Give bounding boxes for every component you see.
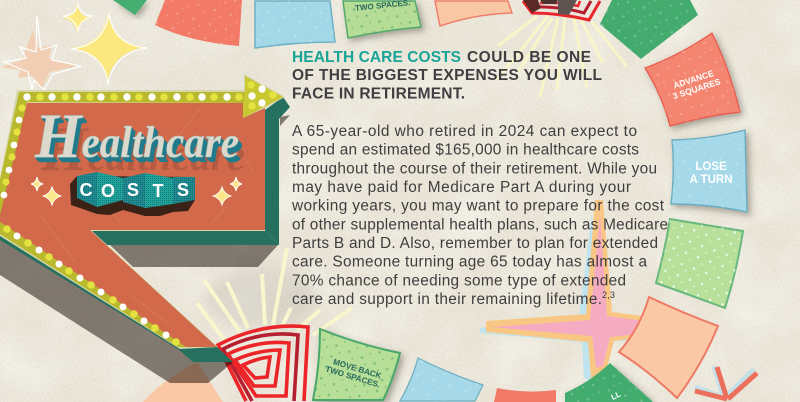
pink retro star xyxy=(480,200,650,380)
body text: 2,3 xyxy=(602,290,615,300)
sign: marquee arrow board xyxy=(0,74,290,362)
small yellow sparkle xyxy=(62,3,93,33)
sign sub-title: COSTS tiles: T xyxy=(152,181,164,201)
large yellow sparkle xyxy=(70,12,147,85)
game square: blue, bottom xyxy=(400,358,483,401)
sign: drop shadow xyxy=(0,115,290,383)
sign title: Healthcare: Healthcare xyxy=(34,100,239,171)
tile label: LOSE xyxy=(695,161,727,173)
game square: blue, top xyxy=(255,1,335,48)
game square: light green, right xyxy=(656,219,743,308)
tile shadow xyxy=(70,176,195,216)
game square: peach, bottom left xyxy=(143,362,223,402)
tile label xyxy=(668,67,722,101)
heading: COULD BE ONE xyxy=(467,49,591,66)
body text: 70% chance of needing some type of extended xyxy=(292,272,626,289)
tile label xyxy=(689,161,733,186)
sign sub-title: COSTS tiles: O xyxy=(101,181,115,201)
sign sparkles xyxy=(31,177,242,205)
top left sparkles xyxy=(0,3,147,90)
red concentric square, top xyxy=(523,0,600,20)
tile label: TWO SPACES. xyxy=(324,364,381,390)
sign title: Healthcare: Healthcare xyxy=(37,104,242,175)
game square: salmon, top xyxy=(155,0,242,46)
game square: lose a turn xyxy=(671,130,747,212)
game square: green, top left xyxy=(113,0,147,15)
tile faces xyxy=(77,172,97,207)
pale trim xyxy=(0,74,285,349)
bulb band xyxy=(0,78,281,347)
sign sub-title: COSTS tiles: S xyxy=(127,180,139,200)
tile label: LL xyxy=(610,390,622,402)
body text: A 65-year-old who retired in 2024 can expect to xyxy=(292,123,637,140)
body text: care. Someone turning age 65 today has almost a xyxy=(292,254,647,271)
scratches xyxy=(40,108,255,325)
sign title: Healthcare: Healthcare xyxy=(40,113,245,184)
orange face xyxy=(0,103,265,347)
sign sub-title: COSTS tiles xyxy=(70,172,195,216)
body text: care and support in their remaining lifetime. xyxy=(292,291,602,308)
body text: throughout the course of their retirement. While you xyxy=(292,160,657,177)
sign title: Healthcare: Healthcare xyxy=(35,102,240,173)
body text: spend an estimated $165,000 in healthcare costs xyxy=(292,142,639,159)
game square: green, top right xyxy=(600,0,698,59)
tile label: A TURN xyxy=(689,174,733,186)
peach starburst xyxy=(0,16,81,90)
heading xyxy=(292,49,602,102)
body text: of other supplemental health plans, such as Medicare xyxy=(292,216,668,233)
tile letters: C xyxy=(80,180,92,200)
body text: Parts B and D. Also, remember to plan for extended xyxy=(292,235,658,252)
heading: OF THE BIGGEST EXPENSES YOU WILL xyxy=(292,67,602,84)
tile label: 3 SQUARES xyxy=(671,76,722,101)
sign sub-title: COSTS tiles: S xyxy=(177,180,189,200)
game square: advance 3 squares xyxy=(645,33,740,126)
teal 3D sides xyxy=(0,97,290,362)
body text xyxy=(291,123,668,308)
game square: peach, top xyxy=(435,1,512,26)
sign title: Healthcare: Healthcare xyxy=(36,103,241,174)
game square: salmon, bottom xyxy=(494,388,556,402)
game square: move back two spaces xyxy=(313,329,400,400)
sunburst rays: bottom xyxy=(197,248,352,342)
heading: FACE IN RETIREMENT. xyxy=(292,86,465,102)
white bulbs xyxy=(1,85,266,338)
tile label: MOVE BACK xyxy=(332,357,383,381)
body text: working years, you may want to prepare for the cost xyxy=(291,198,665,215)
sign title: Healthcare: Healthcare xyxy=(38,105,243,176)
game square: peach, right xyxy=(619,297,718,398)
tile label: ADVANCE xyxy=(672,68,715,90)
yellow bulbs xyxy=(2,81,277,346)
red concentric square, bottom xyxy=(218,326,308,401)
sunburst rays: top xyxy=(497,16,627,97)
arrow head band xyxy=(243,76,283,118)
game square: green, bottom right xyxy=(565,363,653,402)
asterisk decoration xyxy=(695,366,757,399)
game square: light green, top xyxy=(343,0,421,38)
body text: may have paid for Medicare Part A during your xyxy=(292,179,631,196)
heading: HEALTH CARE COSTS xyxy=(292,49,461,66)
